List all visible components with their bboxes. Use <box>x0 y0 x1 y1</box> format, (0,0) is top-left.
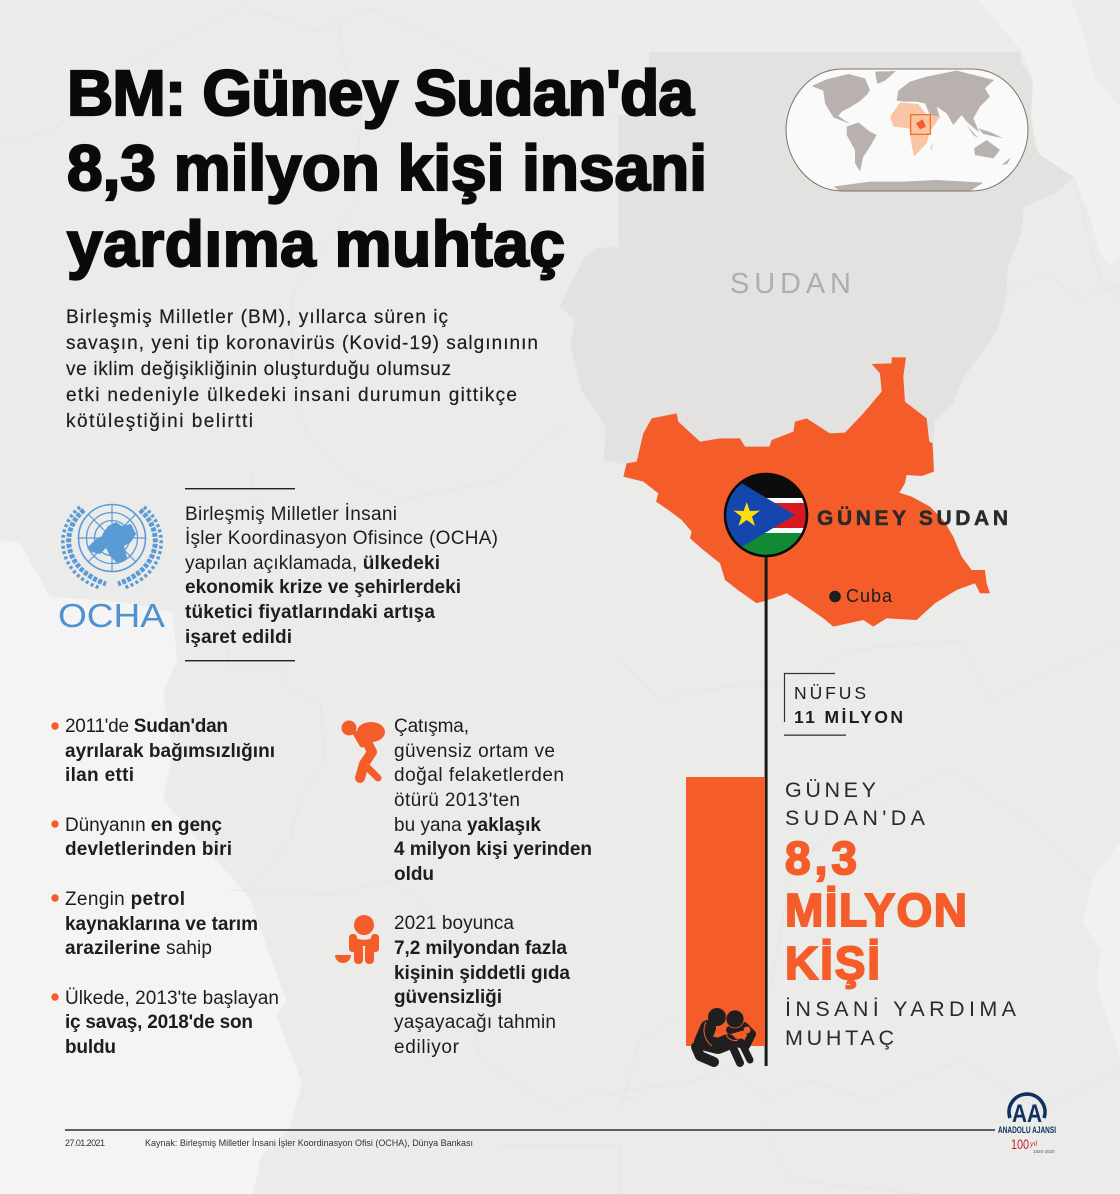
title: 8,3 milyon kişi insani <box>67 132 707 204</box>
OCHA statement <box>185 488 498 661</box>
food insecurity text: 2021 boyunca <box>394 913 514 934</box>
headline statistic: 8,3 <box>785 832 857 884</box>
headline statistic: İNSANİ YARDIMA <box>785 997 1017 1021</box>
headline statistic: KİŞİ <box>785 937 880 989</box>
intro text: savaşın, yeni tip koronavirüs (Kovid-19) salgınının <box>66 333 538 354</box>
title: BM: Güney Sudan'da <box>67 57 694 129</box>
OCHA statement: tüketici fiyatlarındaki artışa <box>185 602 435 623</box>
food insecurity text: yaşayacağı tahmin <box>394 1012 556 1033</box>
bullet list: ayrılarak bağımsızlığını <box>65 741 275 762</box>
headline statistic: GÜNEY <box>785 778 876 802</box>
OCHA statement: ekonomik krize ve şehirlerdeki <box>185 577 461 598</box>
food insecurity text: ediliyor <box>394 1037 460 1058</box>
OCHA statement: işaret edildi <box>185 627 292 648</box>
logo: Anadolu Ajansi: yıl <box>1029 1141 1037 1148</box>
headline statistic: SUDAN'DA <box>785 806 926 830</box>
footer <box>65 1129 995 1148</box>
displacement text <box>394 716 592 885</box>
food insecurity text: 7,2 milyondan fazla <box>394 938 567 959</box>
population box <box>784 674 903 736</box>
intro text: Birleşmiş Milletler (BM), yıllarca süren iç <box>66 307 448 328</box>
OCHA logo: OCHA <box>58 597 165 634</box>
logo: Anadolu Ajansi: AA <box>1012 1100 1042 1128</box>
headline statistic <box>785 778 1017 1050</box>
flag of South Sudan <box>723 472 807 558</box>
intro text: etki nedeniyle ülkedeki insani durumun gittikçe <box>66 385 517 406</box>
bullet list: ilan etti <box>65 765 134 786</box>
headline statistic: MİLYON <box>785 884 967 936</box>
leader line <box>765 556 768 1066</box>
OCHA statement: İşler Koordinasyon Ofisince (OCHA) <box>185 528 498 549</box>
displacement text: doğal felaketlerden <box>394 765 564 786</box>
population box: 11 MİLYON <box>794 707 903 727</box>
bullet list: arazilerine sahip <box>65 938 212 959</box>
headline statistic: MUHTAÇ <box>785 1026 894 1050</box>
logo: Anadolu Ajansi <box>998 1094 1056 1154</box>
label: South Sudan: GÜNEY SUDAN <box>817 507 1008 530</box>
title: yardıma muhtaç <box>67 208 565 280</box>
bullet list: iç savaş, 2018'de son <box>65 1012 253 1033</box>
OCHA statement: yapılan açıklamada, ülkedeki <box>185 553 440 574</box>
logo: Anadolu Ajansi: 1920-2020 <box>1033 1149 1055 1154</box>
OCHA statement: Birleşmiş Milletler İnsani <box>185 504 397 525</box>
displacement text: 4 milyon kişi yerinden <box>394 839 592 860</box>
intro text <box>66 307 538 432</box>
displacement text: güvensiz ortam ve <box>394 741 555 762</box>
displacement text: bu yana yaklaşık <box>394 815 541 836</box>
food insecurity text: güvensizliği <box>394 987 502 1008</box>
displacement text: oldu <box>394 864 434 885</box>
displacement text: Çatışma, <box>394 716 469 737</box>
bullet list: Zengin petrol <box>65 889 185 910</box>
bullet list: Dünyanın en genç <box>65 815 222 836</box>
icon: huddled family <box>696 1008 752 1063</box>
logo: Anadolu Ajansi: 100 <box>1011 1136 1029 1152</box>
bullet list: kaynaklarına ve tarım <box>65 914 258 935</box>
intro text: kötüleştiğini belirtti <box>66 411 253 432</box>
food insecurity text: kişinin şiddetli gıda <box>394 963 570 984</box>
bullet list: 2011'de Sudan'dan <box>65 716 228 737</box>
icon: person carrying a sack <box>342 720 385 778</box>
logo: Anadolu Ajansi: ANADOLU AJANSI <box>998 1125 1056 1135</box>
OCHA logo <box>58 504 165 634</box>
intro text: ve iklim değişikliğinin oluşturduğu olumsuz <box>66 359 451 380</box>
label: Sudan: SUDAN <box>730 268 851 300</box>
population box: NÜFUS <box>794 683 866 703</box>
footer: Kaynak: Birleşmiş Milletler İnsani İşler Koordinasyon Ofisi (OCHA), Dünya Bankası <box>145 1138 473 1148</box>
orange people bar <box>686 777 765 1046</box>
bullet list: Ülkede, 2013'te başlayan <box>65 988 279 1009</box>
bullet list: devletlerinden biri <box>65 839 232 860</box>
icon: crouching person with bowl <box>335 915 379 964</box>
displacement text: ötürü 2013'ten <box>394 790 520 811</box>
food insecurity text <box>394 913 570 1058</box>
city marker: Cuba: Cuba <box>846 586 893 606</box>
bullet list: buldu <box>65 1037 116 1058</box>
locator world map <box>786 69 1028 191</box>
footer: 27.01.2021 <box>65 1138 105 1148</box>
bullet list <box>51 716 279 1058</box>
title <box>67 57 707 280</box>
map: South Sudan <box>623 357 990 627</box>
